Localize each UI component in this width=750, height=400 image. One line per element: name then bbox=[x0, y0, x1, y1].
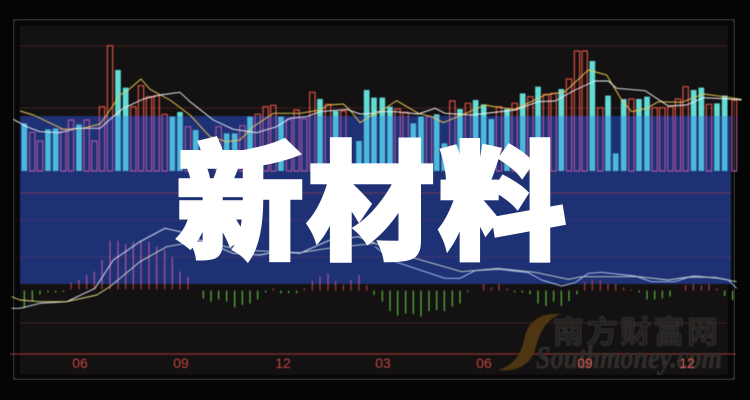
volume bars, left half bbox=[24, 46, 374, 171]
white average line, right bbox=[375, 81, 742, 115]
label 12: 12 bbox=[275, 355, 291, 371]
MACD histogram bbox=[24, 241, 733, 317]
label 09 second: 09 bbox=[577, 355, 593, 371]
blue band bbox=[20, 116, 731, 284]
negative bars, left bbox=[24, 291, 374, 308]
pale line continued bbox=[110, 241, 375, 287]
pale line, left bbox=[12, 287, 110, 302]
label 06: 06 bbox=[72, 355, 88, 371]
time axis labels bbox=[72, 355, 695, 371]
watermark chinese name: 南方财富网 bbox=[553, 315, 720, 350]
grid lines bbox=[10, 46, 736, 354]
solid volume bars bbox=[24, 70, 374, 171]
positive bars, right bbox=[484, 280, 717, 291]
outlined volume bars bbox=[30, 46, 346, 171]
MACD lines bbox=[12, 228, 737, 308]
positive bars, left bbox=[71, 241, 367, 291]
yellow average line bbox=[20, 79, 375, 142]
outlined volume bars bbox=[395, 51, 737, 171]
moving average lines, upper bbox=[13, 70, 742, 142]
label 12 second: 12 bbox=[679, 355, 695, 371]
solid volume bars bbox=[382, 61, 725, 171]
negative bars, right bbox=[382, 291, 733, 317]
label 03: 03 bbox=[375, 355, 391, 371]
title: 新材料 bbox=[177, 134, 570, 275]
white average line bbox=[13, 92, 375, 133]
yellow average line, right bbox=[375, 70, 742, 123]
label 06 second: 06 bbox=[476, 355, 492, 371]
watermark: southmoney bbox=[498, 314, 722, 375]
volume bars, right half bbox=[382, 51, 737, 171]
label 09: 09 bbox=[173, 355, 189, 371]
blue line, right bbox=[375, 247, 737, 288]
pale line, right bbox=[375, 243, 737, 282]
icon: swoosh bbox=[498, 314, 561, 370]
blue line, left bbox=[12, 228, 375, 308]
